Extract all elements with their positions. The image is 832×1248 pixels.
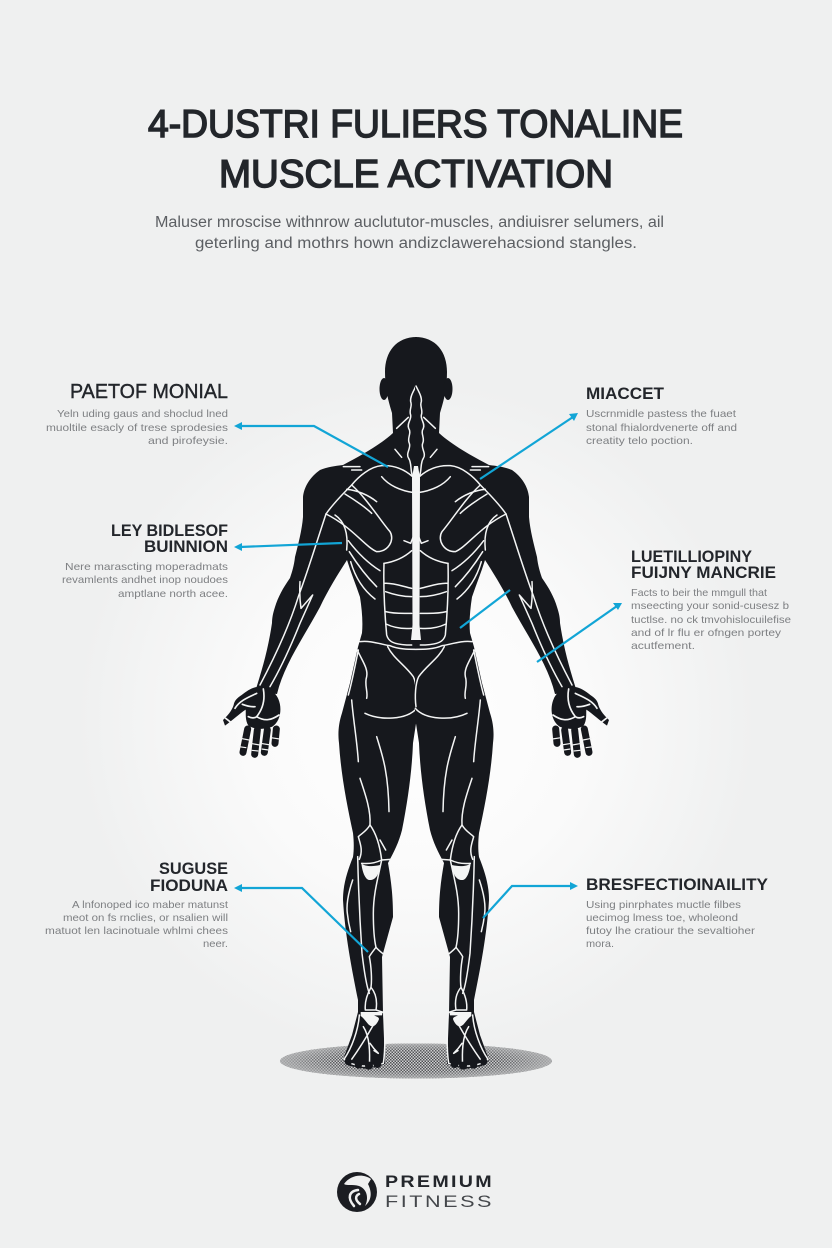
arrow: pectoral label bbox=[234, 422, 388, 467]
callout: upper right bbox=[586, 384, 737, 447]
callout: middle right bbox=[631, 547, 791, 652]
callout: lower left: neer. bbox=[203, 938, 228, 950]
callout: upper right: MIACCET bbox=[586, 384, 665, 403]
arrow: core pointer bbox=[460, 590, 510, 628]
callout: middle left bbox=[62, 521, 228, 600]
callout: middle left: Nere marascting moperadmats bbox=[65, 561, 228, 573]
arrow: biceps label bbox=[234, 543, 342, 551]
callout: lower left: A lnfonoped ico maber matunst bbox=[72, 899, 228, 911]
title: MUSCLE ACTIVATION bbox=[219, 153, 613, 196]
callout: lower left: SUGUSE bbox=[159, 859, 228, 878]
spine bbox=[411, 466, 421, 640]
callout: middle right: mseecting your sonid-cusesz b bbox=[631, 600, 789, 612]
arrow: shoulder label bbox=[480, 413, 578, 479]
callout: upper right: stonal fhialordvenerte off and bbox=[586, 422, 737, 434]
arrow: forearm label bbox=[537, 603, 622, 662]
callout: upper left: and pirofeysie. bbox=[148, 435, 228, 447]
callout: middle right: tuctlse. no ck tmvohislocuilefise bbox=[631, 614, 791, 626]
icon: swirl emblem bbox=[337, 1172, 377, 1212]
subtitle: Maluser mroscise withnrow auclututor-muscles, andiuisrer selumers, ail bbox=[155, 214, 664, 231]
callout: lower right: futoy lhe cratiour the sevaltioher bbox=[586, 925, 756, 937]
callout: lower right: uecimog lmess toe, wholeond bbox=[586, 912, 738, 924]
callout: middle right: FUIJNY MANCRIE bbox=[631, 563, 776, 582]
subtitle: geterling and mothrs hown andizclawerehacsiond stangles. bbox=[195, 235, 637, 252]
callout: lower right: mora. bbox=[586, 938, 614, 950]
logo: PREMIUM bbox=[385, 1172, 494, 1191]
callout: lower right: BRESFECTIOINAILITY bbox=[586, 875, 769, 894]
title: 4-DUSTRI FULIERS TONALINE bbox=[148, 103, 683, 146]
callout: lower right: Using pinrphates muctle filbes bbox=[586, 899, 741, 911]
callout: upper left: PAETOF MONIAL bbox=[70, 381, 228, 403]
callout: lower left: FIODUNA bbox=[150, 876, 228, 895]
callout: upper left: muoltile esacly of trese sprodesies bbox=[46, 422, 228, 434]
body figure bbox=[223, 337, 609, 1070]
callout: middle right: acutfement. bbox=[631, 640, 695, 652]
callout: upper left bbox=[46, 381, 228, 447]
callout: middle left: BUINNION bbox=[144, 537, 228, 556]
callout: upper left: Yeln uding gaus and shoclud lned bbox=[57, 408, 228, 420]
callout: upper right: creatity telo poction. bbox=[586, 435, 693, 447]
arrow: lower leg left label bbox=[234, 884, 368, 952]
callout: lower right bbox=[586, 875, 769, 950]
callout: middle left: revamlents andhet inop noudoes bbox=[62, 574, 228, 586]
callout: lower left: meot on fs rnclies, or nsalien will bbox=[63, 912, 228, 924]
callout: middle right: and of lr flu er ofngen portey bbox=[631, 627, 782, 639]
callout: middle right: Facts to beir the mmgull that bbox=[631, 587, 767, 599]
logo bbox=[337, 1172, 494, 1212]
callout: middle left: amptlane north acee. bbox=[118, 588, 228, 600]
ground shadow bbox=[280, 1044, 552, 1078]
callout: lower left: matuot len lacinotuale whlmi chees bbox=[45, 925, 228, 937]
subtitle bbox=[155, 214, 664, 252]
callout: middle left: LEY BIDLESOF bbox=[111, 521, 228, 540]
callout: lower left bbox=[45, 859, 228, 950]
title bbox=[148, 103, 683, 196]
callout: middle right: LUETILLIOPINY bbox=[631, 547, 753, 566]
logo: FITNESS bbox=[385, 1192, 494, 1211]
arrow: lower leg right label bbox=[483, 882, 578, 918]
callout: upper right: Uscrnmidle pastess the fuaet bbox=[586, 408, 736, 420]
